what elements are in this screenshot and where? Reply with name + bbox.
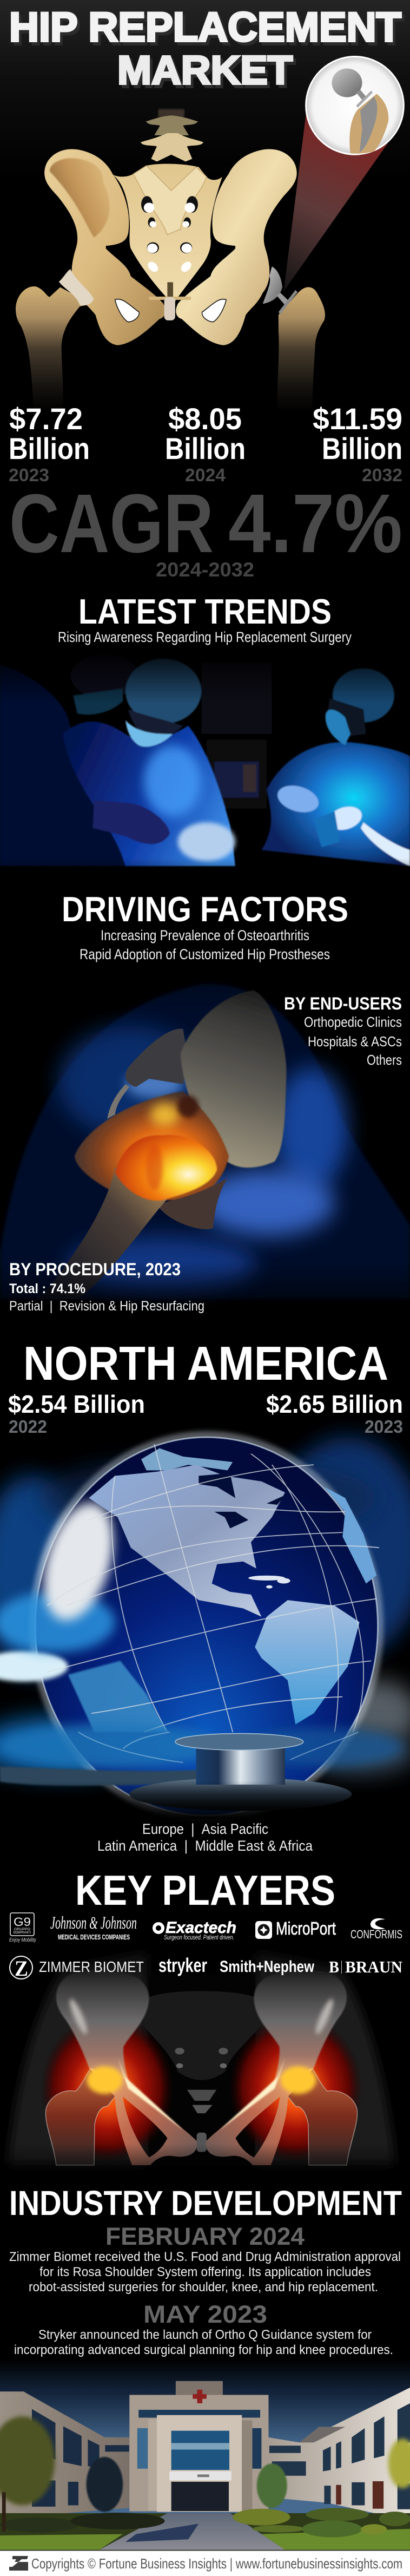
red joint glow: [41, 2014, 362, 2163]
heading: driving factors: DRIVING FACTORS: [62, 889, 348, 929]
red cross: [193, 2390, 207, 2403]
driving factors list: [80, 927, 330, 962]
inset magnifier: implant detail: [306, 57, 404, 154]
left iliac fossa: [50, 158, 110, 238]
left ischium ring: [89, 2068, 197, 2165]
torso silhouette: [8, 1953, 395, 2166]
right nurse scrubs: [261, 742, 410, 866]
stat: CAGR: 2024-2032: [156, 559, 254, 581]
hudson bay and lakes: [199, 1473, 285, 1528]
lumbar vertebrae: [141, 109, 203, 161]
coccyx: [107, 1084, 129, 1119]
logo: gruppo bomprianti: Enjoy Mobility: [9, 1937, 37, 1943]
logo: johnson and johnson: [50, 1913, 137, 1941]
latest trends text: Rising Awareness Regarding Hip Replacement Surgery: [58, 629, 352, 645]
logo: gruppo bomprianti: [9, 1913, 37, 1943]
logo: gruppo bomprianti: BOMPRIANTI: [14, 1931, 31, 1935]
stethoscope disc: [129, 1778, 352, 1811]
main surgeon head and cap: [125, 659, 201, 746]
logo: b braun: B: [329, 1957, 339, 1976]
greenland and arctic: [141, 1448, 233, 1470]
left wing windows: [32, 2409, 129, 2507]
segment: by procedure: BY PROCEDURE, 2023: [9, 1260, 181, 1279]
photo: surgeons in operating room: [0, 654, 410, 866]
globe haze rim: [34, 1436, 379, 1817]
stat: 2024 market size: [165, 402, 246, 485]
joint hot spots: [87, 2058, 316, 2130]
left femur: [16, 286, 91, 411]
left wing: [0, 2391, 129, 2519]
entrance doors: [171, 2482, 229, 2511]
stat: 2023 market size: 2023: [9, 465, 49, 485]
hip implant: [263, 266, 297, 314]
pacific landmass reflection: [68, 1661, 167, 1732]
stat: 2023 market size: $7.72: [9, 402, 83, 436]
acetabulum glow: [75, 1091, 229, 1200]
logo: gruppo bomprianti: GRUPPO: [14, 1928, 30, 1931]
development: february 2024: for its Rosa Shoulder System offering. Its application includes: [39, 2265, 371, 2279]
title: hip replacement market: MARKET: [120, 51, 295, 96]
sky: [0, 2359, 410, 2448]
stethoscope collar: [175, 1734, 303, 1750]
photo: hospital building: [0, 2359, 410, 2551]
stat: north america 2022: 2022: [9, 1417, 47, 1437]
development: february 2024: robot-assisted surgeries for shoulder, knee, and hip replacement.: [29, 2280, 378, 2295]
stat: CAGR: [9, 477, 402, 581]
right hip bone x-ray: [254, 1971, 347, 2083]
sacrum: [113, 164, 222, 301]
sacrum and coccyx: [142, 1991, 261, 2152]
sacrum bone: [125, 1029, 188, 1087]
footer logo: [9, 2556, 28, 2571]
stat: CAGR: CAGR: [9, 477, 214, 570]
ilium wing: [181, 991, 286, 1168]
stat: north america 2023: $2.65 Billion: [266, 1390, 403, 1418]
heading: key players: KEY PLAYERS: [75, 1866, 335, 1914]
right nurse head: [326, 668, 394, 745]
right femur x-ray: [288, 2068, 358, 2165]
drapes: [178, 822, 235, 861]
nurse gloves: [275, 781, 364, 847]
stat: north america 2023: [266, 1390, 403, 1437]
lower pelvis: [157, 1178, 228, 1229]
sacral foramina: [141, 196, 198, 274]
segment: by end-users: Others: [367, 1052, 402, 1068]
right wing: [268, 2388, 410, 2521]
development: may 2023: MAY 2023: [143, 2300, 267, 2328]
title: hip replacement market: HIP REPLACEMENT: [12, 8, 404, 54]
africa land: [324, 1487, 376, 1584]
ilium highlights: [67, 1997, 336, 2036]
logo: b braun: BRAUN: [345, 1957, 402, 1976]
title: hip replacement market: [9, 4, 404, 96]
title: hip replacement market: HIP REPLACEMENT: [9, 4, 401, 50]
left hip bone: [44, 149, 166, 345]
logo: smith and nephew: Smith+Nephew: [220, 1958, 315, 1976]
title: hip replacement market: MARKET: [117, 48, 293, 93]
stat: 2032 market size: 2032: [362, 465, 402, 485]
logo: stryker: stryker: [158, 1954, 207, 1976]
stat: north america 2022: [8, 1390, 145, 1437]
trees: [0, 2416, 410, 2532]
arm highlight: [361, 822, 410, 866]
development: may 2023: [14, 2300, 393, 2357]
logo: microport: MicroPort: [276, 1918, 336, 1938]
development: february 2024: FEBRUARY 2024: [105, 2223, 305, 2250]
other regions list: Europe | Asia Pacific: [142, 1821, 268, 1837]
reflected tubes: [78, 1732, 358, 1762]
illustration: pelvis skeleton with hip implant: [16, 57, 404, 411]
driving factors list: Increasing Prevalence of Osteoarthritis: [101, 927, 309, 943]
body silhouette: [0, 984, 410, 1299]
photo: glowing hip joint: [0, 984, 410, 1299]
segment: by procedure: Partial | Revision & Hip Resurfacing: [9, 1299, 204, 1314]
surgeon hand: [93, 801, 170, 844]
other regions list: [97, 1821, 313, 1854]
implant ball: [332, 69, 362, 97]
right hip bone: [176, 149, 297, 345]
segment: by end-users: [284, 994, 402, 1068]
north america land: [89, 1465, 285, 1617]
logo: zimmer biomet: Z: [15, 1956, 28, 1981]
logo: exactech: [154, 1919, 236, 1941]
logo: exactech: Surgeon focused. Patient driven.: [164, 1933, 234, 1941]
illustration: glowing pelvis x-ray: [8, 1953, 395, 2166]
logo: exactech: Exactech: [166, 1919, 236, 1937]
stethoscope stem: [196, 1743, 285, 1785]
stat: north america 2022: $2.54 Billion: [8, 1390, 145, 1418]
segment: by procedure: [9, 1260, 204, 1314]
zoom beam: [283, 110, 387, 291]
back surgeon head: [71, 654, 138, 715]
right femur: [277, 287, 325, 411]
femoral neck cartilage: [59, 269, 94, 305]
footer bar: [0, 2550, 410, 2576]
driving factors list: Rapid Adoption of Customized Hip Prostheses: [80, 946, 330, 962]
stat: 2023 market size: Billion: [9, 431, 90, 466]
latitude and longitude grid: [47, 1444, 379, 1732]
other regions list: Latin America | Middle East & Africa: [97, 1838, 313, 1854]
stethoscope base: [0, 1724, 402, 1811]
development: february 2024: [9, 2223, 401, 2295]
shrubs: [0, 2508, 410, 2537]
sacral ridge: [134, 166, 207, 235]
development: may 2023: incorporating advanced surgical planning for hip and knee procedures.: [14, 2343, 393, 2357]
logo: gruppo bomprianti: G9: [14, 1915, 31, 1929]
stat: 2023 market size: [9, 402, 90, 485]
pubic symphysis: [149, 282, 191, 320]
logo: johnson and johnson: MEDICAL DEVICES COMPANIES: [58, 1933, 130, 1941]
development: may 2023: Stryker announced the launch of Ortho Q Guidance system for: [38, 2328, 372, 2342]
left femur x-ray: [45, 2068, 115, 2165]
logo: microport: [255, 1918, 336, 1939]
glass reflection behind stethoscope: [0, 1724, 402, 1768]
photo: crystal globe on stethoscope: [0, 1436, 410, 1817]
stat: 2032 market size: [313, 402, 402, 485]
light streak: [0, 1493, 126, 1682]
logo: zimmer biomet: [10, 1956, 144, 1981]
blue body glow: [57, 1026, 348, 1292]
stat: north america 2023: 2023: [365, 1417, 403, 1437]
monitors: [201, 662, 272, 809]
caribbean islands: [248, 1576, 290, 1589]
stat: 2024 market size: Billion: [165, 431, 246, 466]
femur shaft: [39, 1167, 167, 1299]
femur cutaway: [349, 94, 388, 154]
globe sphere: [35, 1437, 378, 1815]
stat: 2024 market size: $8.05: [168, 402, 242, 436]
stat: 2032 market size: $11.59: [313, 402, 402, 436]
central windows: [171, 2431, 229, 2470]
main surgeon gown: [63, 722, 235, 866]
obturator openings: [115, 299, 226, 322]
back surgeon: [0, 665, 173, 866]
stethoscope tube: [0, 1767, 209, 1786]
grass and road: [0, 2513, 410, 2551]
stat: 2024 market size: 2024: [185, 465, 226, 485]
central block: [129, 2381, 268, 2512]
entrance sign: [169, 2472, 232, 2480]
segment: by procedure: Total : 74.1%: [9, 1281, 85, 1296]
south america land: [255, 1600, 360, 1725]
left hip bone x-ray: [56, 1971, 149, 2083]
logo: johnson and johnson: Johnson & Johnson: [50, 1913, 137, 1933]
femoral head: [115, 1135, 217, 1201]
right wing windows: [269, 2403, 410, 2509]
logo: conformis: [351, 1918, 402, 1941]
background glow: [0, 1437, 410, 1777]
right ischium ring: [206, 2068, 314, 2165]
heading: latest trends: LATEST TRENDS: [78, 592, 332, 631]
logo: zimmer biomet: ZIMMER BIOMET: [39, 1958, 144, 1975]
